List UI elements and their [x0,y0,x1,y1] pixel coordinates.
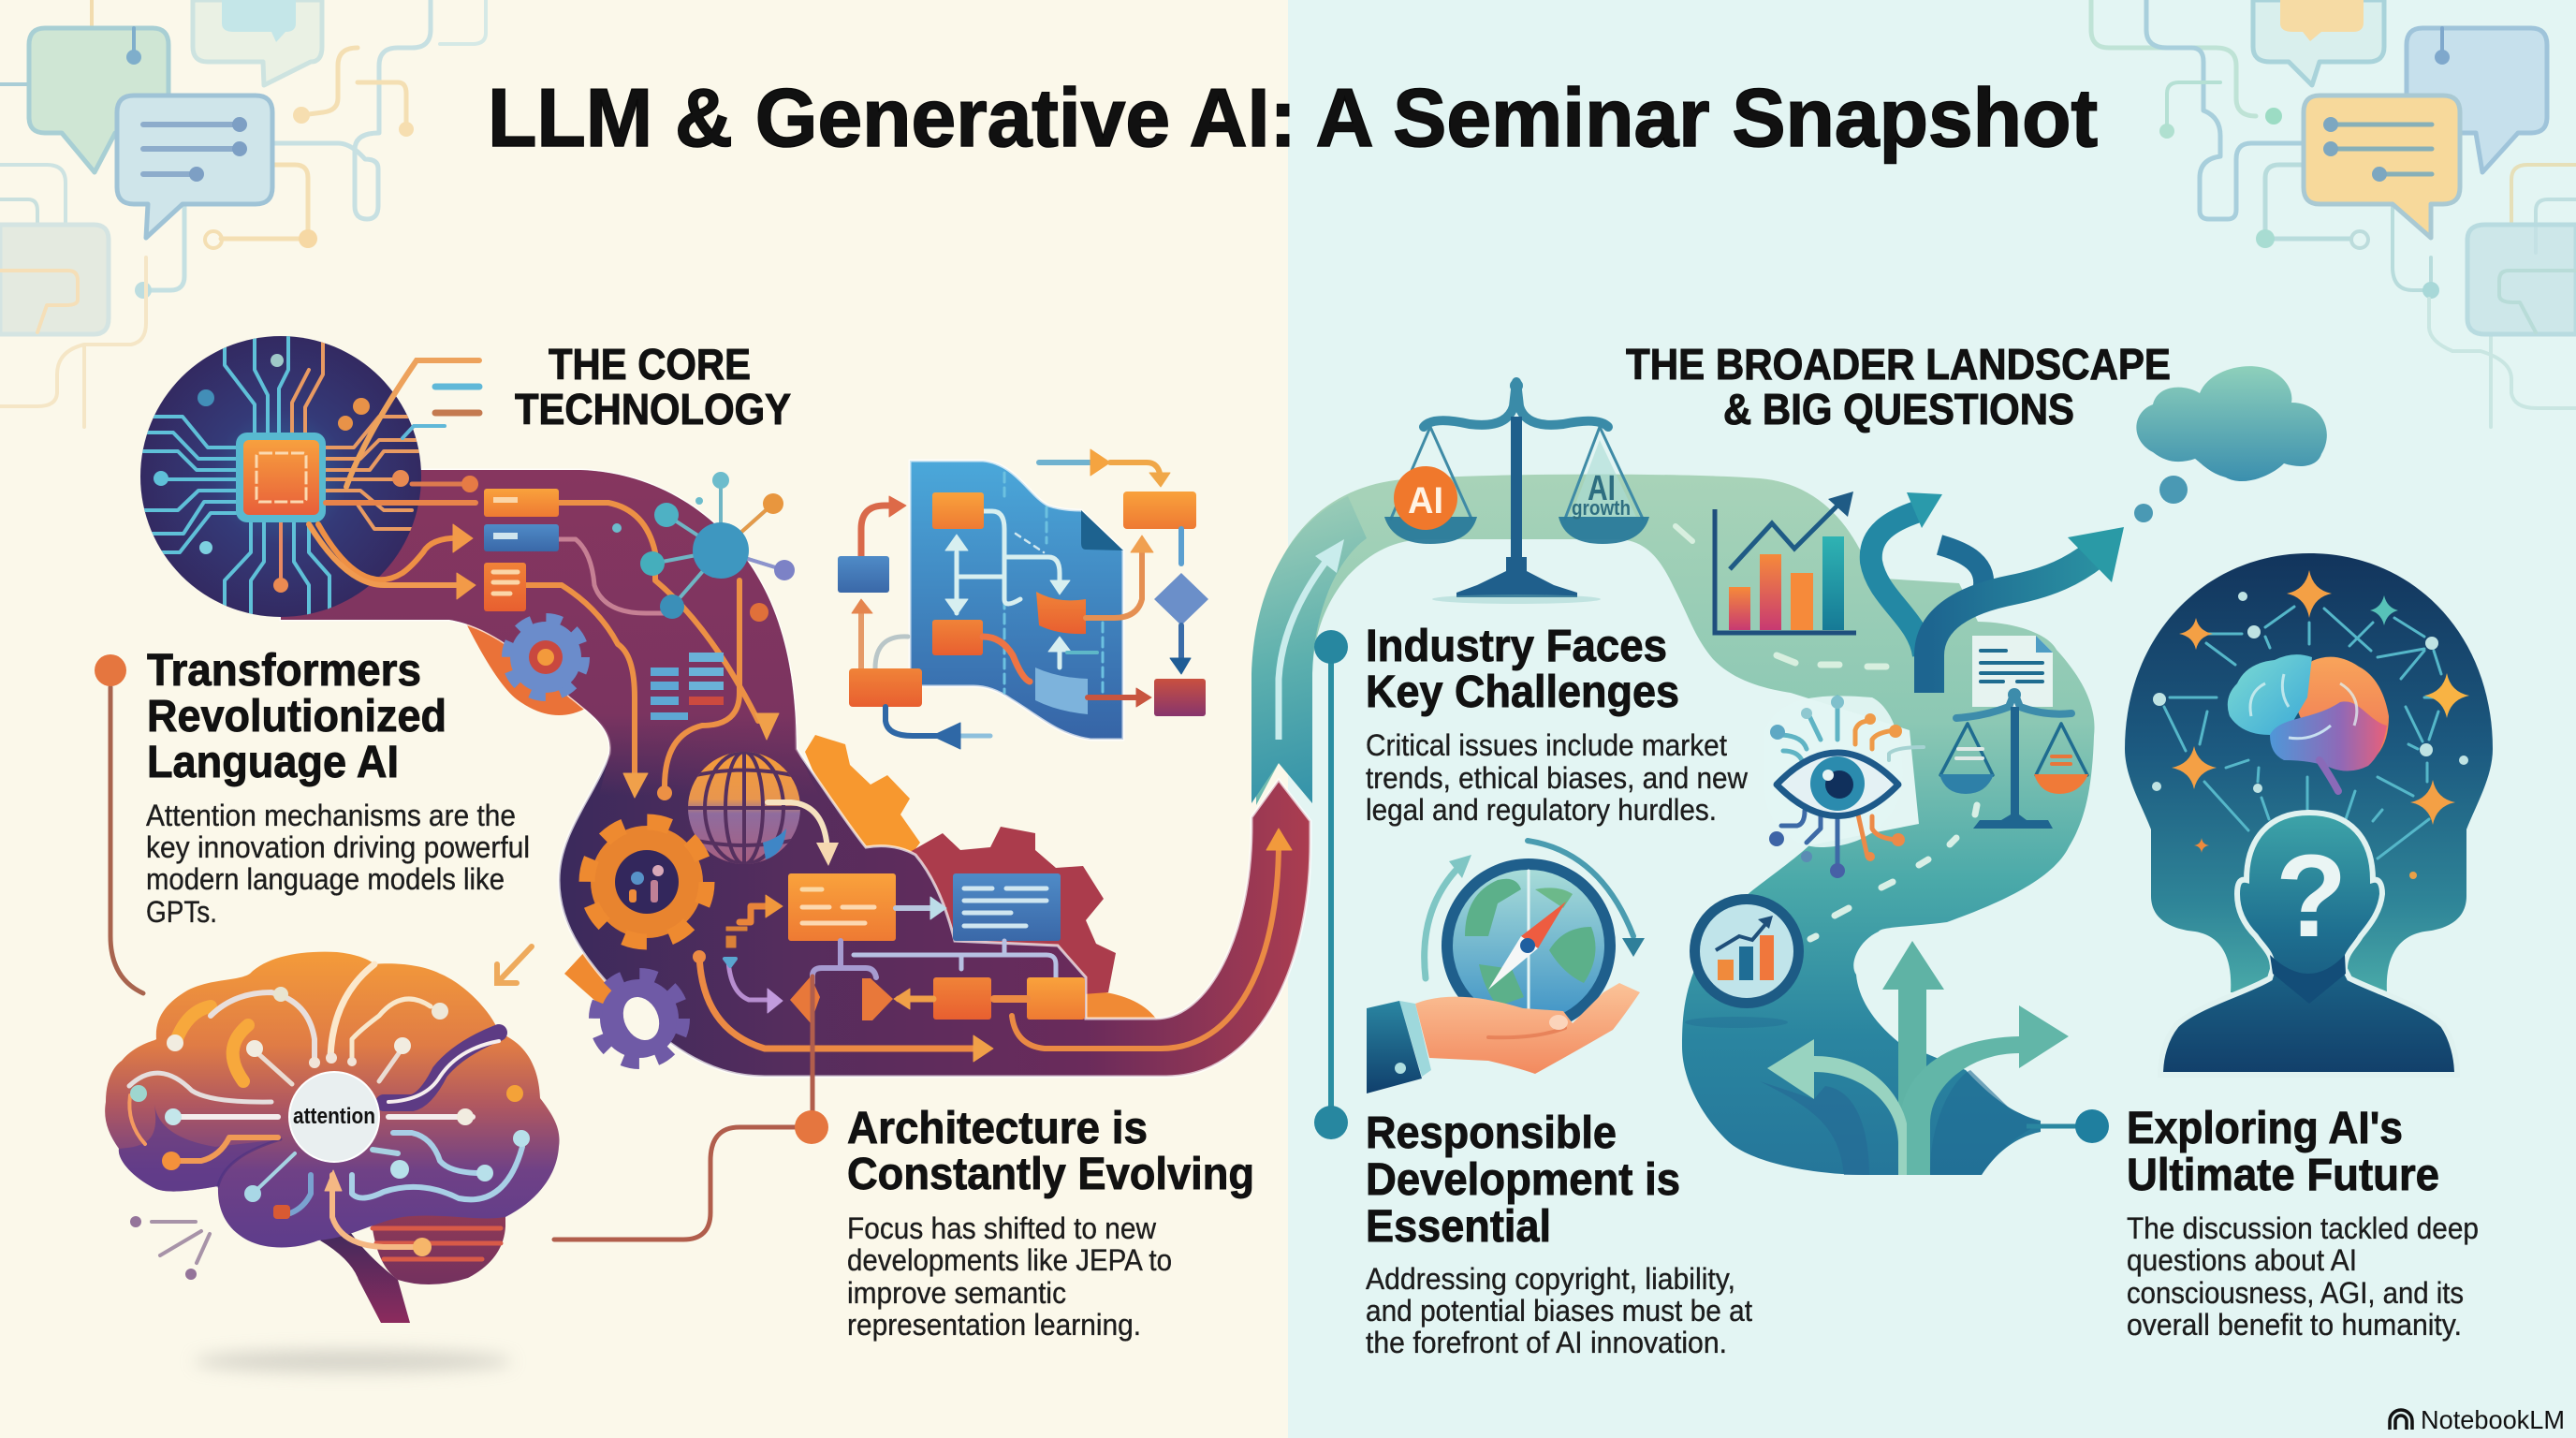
icon: attention brain [105,952,560,1323]
connector: architecture callout [554,976,828,1240]
icon: head with brain and question mark: ? [2276,831,2347,961]
icon: ground shadow under brain [194,1350,512,1372]
text: responsible development is essential: the forefront of AI innovation. [1366,1326,1727,1359]
text: industry faces key challenges: legal and regulatory hurdles. [1366,793,1717,827]
flow boxes on road [309,489,779,800]
data table on road [651,653,724,720]
red gear behind road [910,827,1116,996]
icon: large balance scale: AI [1588,469,1616,508]
icon: attention brain: attention [293,1104,375,1129]
icon: compass globe in hand [1367,841,1645,1093]
text: industry faces key challenges: Key Challenges [1366,668,1679,717]
icon: blue gear [506,618,585,697]
icon: small orange pointer arrow [497,946,532,983]
connector: transformers callout [95,654,143,993]
text: exploring AI's ultimate future: consciousness, AGI, and its [2127,1276,2464,1310]
flow diagram boxes lower road [693,829,1292,1062]
arrows: forked arrows [1871,492,2124,693]
icon: document and small scale [1939,636,2088,829]
text: architecture is constantly evolving: Focus has shifted to new [847,1211,1157,1245]
heading: the core technology [515,340,791,433]
text: responsible development is essential [1366,1108,1752,1359]
icon: head with brain and question mark [2125,553,2493,1075]
text: responsible development is essential: Development is [1366,1155,1680,1205]
text: transformers revolutionized language AI: Language AI [147,738,399,787]
illustration: purple technology road with gears [281,470,1310,1077]
text: exploring AI's ultimate future: overall benefit to humanity. [2127,1308,2462,1342]
text: industry faces key challenges: Critical issues include market [1366,728,1727,762]
panel: flow document diagram [838,449,1208,749]
icon: microchip in circle [140,323,421,623]
icon: molecule network [612,472,795,622]
text: architecture is constantly evolving: developments like JEPA to [847,1243,1172,1277]
icon: globe grid [683,752,839,866]
heading: the broader landscape: THE BROADER LANDSCAPE [1626,340,2171,389]
text: exploring AI's ultimate future [2127,1104,2479,1342]
icon: large balance scale: AI [1408,480,1443,521]
text: architecture is constantly evolving: representation learning. [847,1308,1141,1342]
illustration: teal landscape road [1251,475,2095,1175]
arrows: upward fork on road [1760,941,2069,1175]
icon: purple gear [595,975,683,1063]
icon: cloud and thought dots [2134,366,2327,522]
logo: NotebookLM: NotebookLM [2421,1405,2565,1434]
text: exploring AI's ultimate future: The discussion tackled deep [2127,1211,2479,1245]
icon: orange gear [587,822,707,942]
orange patch under band [464,620,608,715]
text: architecture is constantly evolving: improve semantic [847,1276,1066,1310]
icon: large balance scale [1384,379,1649,604]
text: industry faces key challenges: trends, ethical biases, and new [1366,761,1749,795]
text: transformers revolutionized language AI: Transformers [147,646,421,696]
text: exploring AI's ultimate future: questions about AI [2127,1243,2357,1277]
decoration: top right chat bubbles and circuit lines [2091,0,2576,427]
text: architecture is constantly evolving: Constantly Evolving [847,1150,1254,1199]
text: responsible development is essential: Essential [1366,1202,1551,1252]
text: exploring AI's ultimate future: Ultimate Future [2127,1151,2439,1200]
text: responsible development is essential: and potential biases must be at [1366,1294,1752,1328]
text: industry faces key challenges [1366,622,1749,827]
text: responsible development is essential: Addressing copyright, liability, [1366,1262,1735,1296]
text: transformers revolutionized language AI: key innovation driving powerful [146,830,530,864]
icon: spark marks near brain [130,1216,210,1280]
icon: eye with circuit [1764,696,1924,878]
heading: the core technology: TECHNOLOGY [515,385,791,433]
text: transformers revolutionized language AI: Revolutionized [147,692,446,741]
text: responsible development is essential: Responsible [1366,1108,1617,1158]
title: LLM & Generative AI: A Seminar Snapshot [488,71,2098,164]
callout line: industry and responsible [1314,630,1348,1139]
orange gear behind road [564,735,1156,1020]
text: industry faces key challenges: Industry Faces [1366,622,1667,671]
heading: the broader landscape [1626,340,2171,433]
text: transformers revolutionized language AI: Attention mechanisms are the [146,799,516,832]
main road [281,470,1310,1077]
text: transformers revolutionized language AI: modern language models like [146,862,505,896]
icon: bar chart with trend line [1715,492,1856,633]
text: transformers revolutionized language AI [146,646,530,929]
text: transformers revolutionized language AI: GPTs. [146,895,217,929]
icon: large balance scale: growth [1572,496,1631,520]
heading: the broader landscape: & BIG QUESTIONS [1723,385,2074,433]
text: exploring AI's ultimate future: Exploring AI's [2127,1104,2403,1153]
icon: magnifier with chart [1685,894,1804,1028]
heading: the core technology: THE CORE [549,340,751,389]
text: architecture is constantly evolving: Architecture is [847,1104,1148,1153]
icon: circuit output lines [338,360,479,492]
text: architecture is constantly evolving [847,1104,1254,1342]
callout dot: exploring [2027,1109,2109,1143]
decoration: top left chat bubbles and circuit lines [0,0,486,427]
